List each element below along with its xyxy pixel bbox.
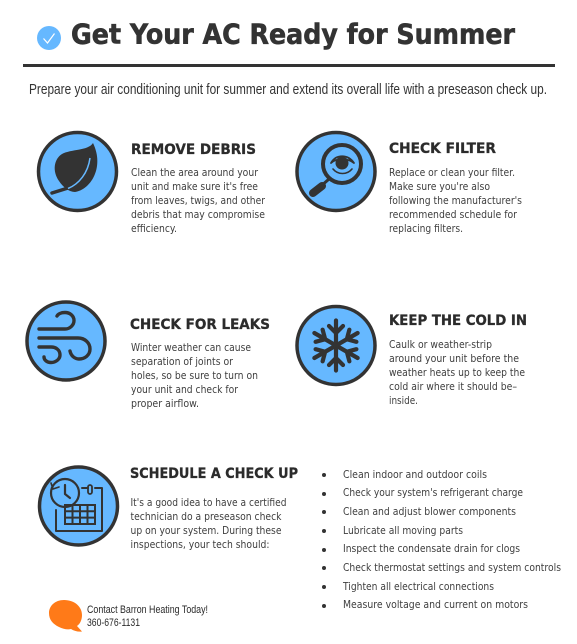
header rule <box>23 64 555 67</box>
text block: separation of joints or <box>131 356 234 368</box>
text block: holes, so be sure to turn on <box>131 370 258 382</box>
text block <box>131 167 266 235</box>
heading: CHECK FILTER <box>389 141 496 157</box>
text block: replacing filters. <box>389 223 463 235</box>
icon: title check badge <box>37 26 61 50</box>
checklist: Lubricate all moving parts <box>343 525 463 537</box>
panel: check for leaks <box>27 302 270 410</box>
text block: proper airflow. <box>131 398 199 410</box>
contact text: 360-676-1131 <box>87 617 140 629</box>
icon: orange speech bubble <box>49 600 82 632</box>
icon: clock and calendar <box>40 467 118 545</box>
icon: leaf <box>38 132 116 210</box>
text block: Replace or clean your filter. <box>389 167 515 179</box>
panel: schedule a check up <box>40 466 298 551</box>
text block: around your unit before the <box>389 353 519 365</box>
panel: keep the cold in <box>297 306 527 407</box>
heading: KEEP THE COLD IN <box>389 313 527 329</box>
text block: debris that may compromise <box>131 209 265 221</box>
checklist: Check your system's refrigerant charge <box>343 487 523 499</box>
text block: up on your system. During these <box>130 525 282 537</box>
text block <box>130 497 286 551</box>
text block: It's a good idea to have a certified <box>130 497 286 509</box>
text block: unit and make sure it's free <box>131 181 258 193</box>
contact text: Contact Barron Heating Today! <box>87 604 208 616</box>
heading: REMOVE DEBRIS <box>131 142 256 158</box>
checklist: Measure voltage and current on motors <box>343 599 528 611</box>
checklist: Clean and adjust blower components <box>343 506 516 518</box>
checklist: Tighten all electrical connections <box>342 581 494 593</box>
text block: Caulk or weather-strip <box>389 339 492 351</box>
text block: inspections, your tech should: <box>130 539 270 551</box>
text block: weather heats up to keep the <box>389 367 525 379</box>
text block: from leaves, twigs, and other <box>131 195 266 207</box>
text block: Winter weather can cause <box>131 342 251 354</box>
checklist <box>322 469 561 611</box>
checklist: Clean indoor and outdoor coils <box>343 469 487 481</box>
heading: SCHEDULE A CHECK UP <box>130 466 298 482</box>
panel: remove debris <box>38 132 266 235</box>
text block <box>389 339 525 407</box>
text block: inside. <box>389 395 418 407</box>
panel: check filter <box>297 132 522 235</box>
contact text <box>87 604 208 629</box>
icon: magnifier with eye <box>297 132 375 210</box>
text block: Clean the area around your <box>131 167 259 179</box>
text block: technician do a preseason check <box>130 511 282 523</box>
checklist: Inspect the condensate drain for clogs <box>343 543 520 555</box>
title: Get Your AC Ready for Summer <box>71 18 515 50</box>
text block <box>131 342 258 410</box>
icon: snowflake <box>297 306 375 384</box>
text block: your unit and check for <box>131 384 239 396</box>
text block: recommended schedule for <box>389 209 518 221</box>
heading: CHECK FOR LEAKS <box>130 317 270 333</box>
text block: efficiency. <box>131 223 177 235</box>
icon: wind <box>27 302 105 380</box>
text block: cold air where it should be– <box>389 381 517 393</box>
text block: following the manufacturer's <box>389 195 522 207</box>
text block <box>389 167 522 235</box>
text block: Make sure you're also <box>389 181 490 193</box>
